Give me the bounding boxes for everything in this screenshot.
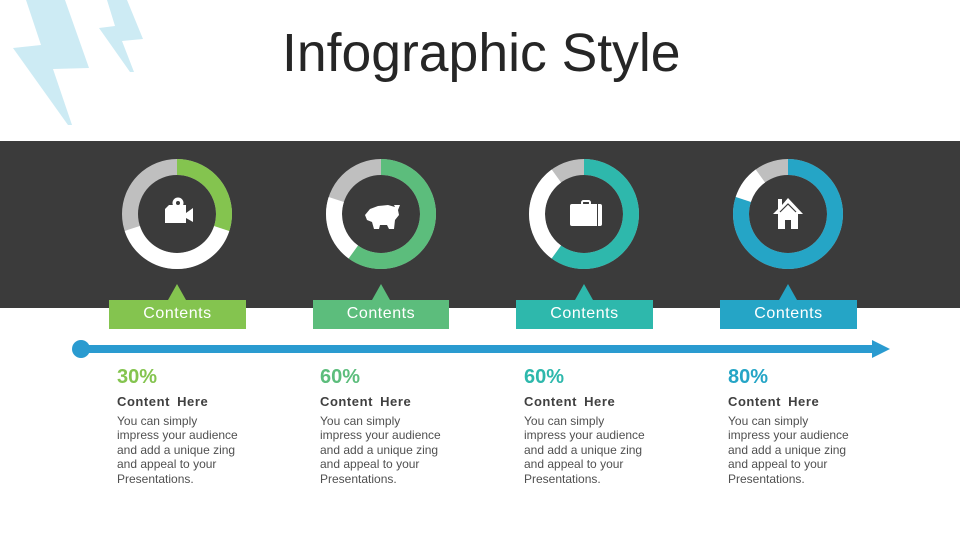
heading 2: Content Here <box>320 394 411 409</box>
percent 4: 80% <box>728 366 768 388</box>
percent 2: 60% <box>320 366 360 388</box>
icon: video camera <box>165 198 193 223</box>
body 1: and add a unique zing <box>117 443 235 457</box>
title: Infographic Style <box>282 24 681 83</box>
body 1 <box>117 414 238 486</box>
donut 3 <box>537 167 631 261</box>
body 3: You can simply <box>524 414 604 428</box>
icon: piggy bank <box>365 205 400 229</box>
body 2: and appeal to your <box>320 457 419 471</box>
label pointers <box>168 284 797 300</box>
label 2 <box>313 300 449 329</box>
body 3 <box>524 414 645 486</box>
icon: lightning bolts <box>13 0 143 125</box>
label 1 <box>109 300 246 329</box>
label 4 <box>720 300 857 329</box>
body 3: and appeal to your <box>524 457 623 471</box>
donut 1 <box>130 167 224 261</box>
heading 3: Content Here <box>524 394 615 409</box>
body 3: Presentations. <box>524 472 601 486</box>
label 3: Contents <box>550 305 619 322</box>
body 1: Presentations. <box>117 472 194 486</box>
body 3: impress your audience <box>524 428 645 442</box>
donut 4 <box>741 167 835 261</box>
heading 1: Content Here <box>117 394 208 409</box>
body 2: Presentations. <box>320 472 397 486</box>
donut 2 <box>334 167 428 261</box>
icon: house <box>773 198 803 229</box>
body 4: Presentations. <box>728 472 805 486</box>
label 2: Contents <box>347 305 415 322</box>
percent 3: 60% <box>524 366 564 388</box>
body 4: and add a unique zing <box>728 443 846 457</box>
timeline arrow <box>72 340 890 358</box>
dark band <box>0 141 960 308</box>
label 1: Contents <box>143 305 212 322</box>
body 3: and add a unique zing <box>524 443 642 457</box>
body 2 <box>320 414 441 486</box>
icon: briefcase <box>570 201 602 226</box>
body 1: You can simply <box>117 414 197 428</box>
label 3 <box>516 300 653 329</box>
label 4: Contents <box>754 305 823 322</box>
body 2: impress your audience <box>320 428 441 442</box>
body 2: You can simply <box>320 414 400 428</box>
body 1: and appeal to your <box>117 457 216 471</box>
percent 1: 30% <box>117 366 157 388</box>
heading 4: Content Here <box>728 394 819 409</box>
body 2: and add a unique zing <box>320 443 438 457</box>
body 4: and appeal to your <box>728 457 827 471</box>
body 4 <box>728 414 849 486</box>
body 4: You can simply <box>728 414 808 428</box>
body 4: impress your audience <box>728 428 849 442</box>
body 1: impress your audience <box>117 428 238 442</box>
